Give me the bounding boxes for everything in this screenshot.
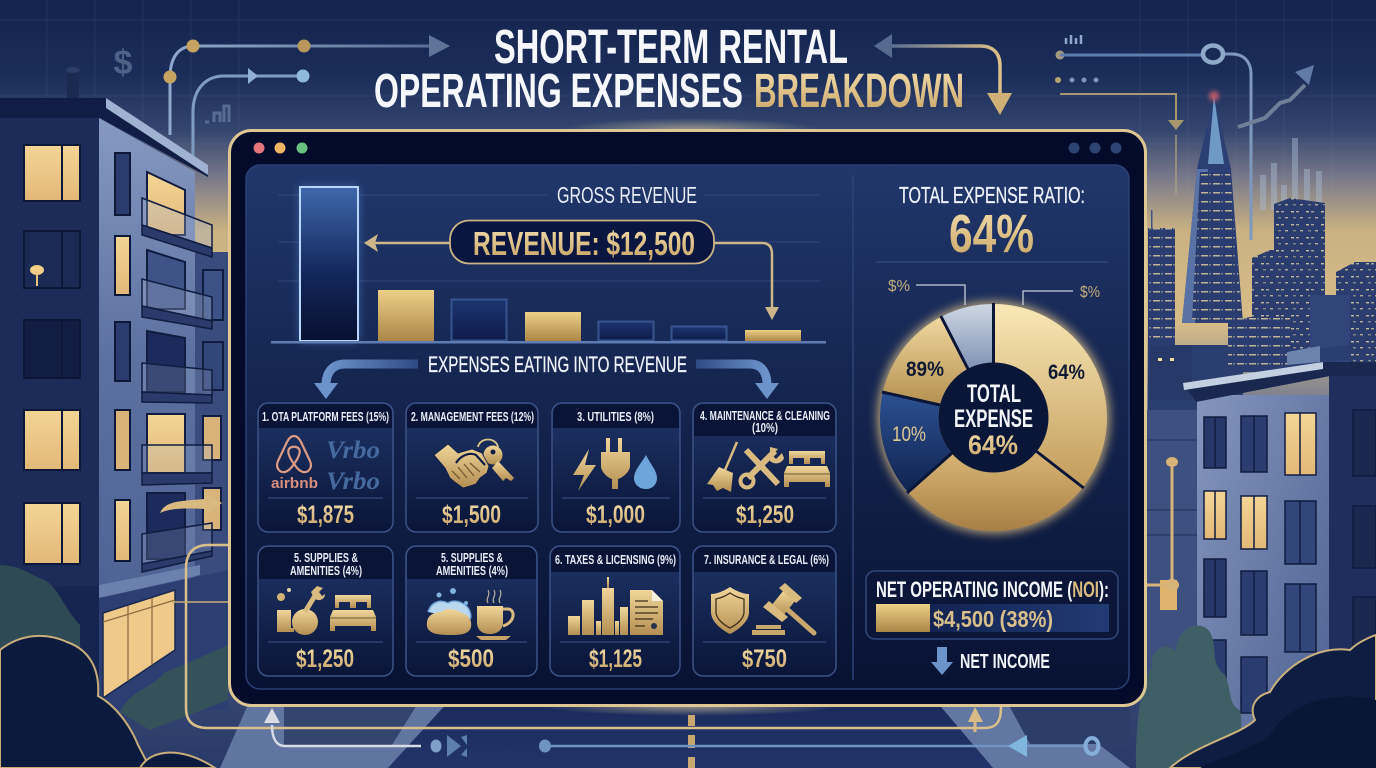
callout: revenue: REVENUE: $12,500: [473, 225, 695, 262]
icon: city buildings: [568, 577, 628, 635]
window toolbar dots: [1068, 142, 1122, 154]
card: supplies and amenities, maintenance items: $1,250: [296, 645, 354, 673]
donut chart: 89%: [906, 358, 944, 381]
arrow: revenue to gross bar: [364, 234, 450, 252]
card: insurance and legal: [693, 546, 836, 676]
arrow: left building: [160, 492, 222, 515]
street: [220, 700, 1130, 768]
donut chart: [878, 278, 1110, 534]
icon: cup, fruit and wrench: [277, 586, 325, 635]
donut chart: 10%: [892, 423, 926, 446]
arrow: revenue to last bar: [714, 243, 779, 320]
icon: bed: [784, 451, 830, 487]
title: BREAKDOWN: [754, 65, 964, 118]
donut chart: TOTAL: [967, 380, 1021, 408]
card: taxes and licensing: 6. TAXES & LICENSING (9%): [555, 552, 676, 567]
card: maintenance and cleaning: 4. MAINTENANCE & CLEANING: [700, 408, 830, 423]
icon: plug: [601, 438, 630, 489]
decorative gold route line: [186, 545, 1001, 728]
heading: gross revenue: GROSS REVENUE: [557, 182, 697, 208]
background bars right: [1260, 138, 1322, 210]
card: management fees: [406, 403, 538, 532]
decorative flow lines top right: [874, 34, 1314, 240]
icon: water drop: [634, 455, 657, 489]
arrow: expenses left: [314, 364, 418, 399]
building mid right: [1146, 410, 1201, 720]
balconies: [142, 198, 212, 572]
icon: shield: [711, 587, 749, 634]
card: maintenance and cleaning: (10%): [752, 420, 778, 435]
value: total expense ratio: 64%: [949, 204, 1034, 264]
callout: revenue: [450, 220, 714, 264]
donut chart: $%: [1080, 284, 1100, 301]
icon: coffee cup: [476, 590, 513, 640]
card: supplies and amenities, soap and coffee: 5. SUPPLIES &: [441, 550, 503, 565]
icon: Vrbo logos: Vrbo: [326, 468, 380, 495]
heading: expenses eating into revenue: EXPENSES EATING INTO REVENUE: [428, 352, 687, 377]
donut chart: EXPENSE: [954, 405, 1033, 433]
bar chart: gross revenue vs expenses: [271, 187, 826, 344]
icon: gavel: [752, 583, 814, 635]
donut chart: 64%: [968, 430, 1018, 460]
title: [374, 21, 964, 118]
card: utilities: $1,000: [586, 501, 645, 529]
road flow arrows: [264, 707, 1098, 757]
icon: Vrbo logos: [326, 437, 380, 495]
label: net income: NET INCOME: [960, 651, 1050, 673]
donut chart: 64%: [1048, 361, 1085, 384]
bushes right: [1136, 626, 1376, 768]
card: supplies and amenities, maintenance items: 5. SUPPLIES &: [294, 550, 358, 565]
title: SHORT-TERM RENTAL: [494, 21, 848, 74]
icon: dollar sign: $: [114, 44, 133, 82]
card: management fees: 2. MANAGEMENT FEES (12%): [411, 409, 534, 424]
building left: [0, 67, 228, 768]
skyline right: [1148, 91, 1376, 410]
bushes left: [0, 565, 228, 768]
card: OTA platform fees: 1. OTA PLATFORM FEES (15%): [262, 409, 389, 424]
card: insurance and legal: 7. INSURANCE & LEGAL (6%): [704, 552, 829, 567]
decorative flow lines top left: [164, 35, 450, 165]
donut chart: $%: [888, 278, 910, 295]
card: OTA platform fees: [258, 403, 393, 532]
heading: total expense ratio: TOTAL EXPENSE RATIO:: [899, 182, 1085, 208]
panel: net operating income: $4,500 (38%): [933, 606, 1053, 632]
title: OPERATING EXPENSES: [374, 65, 743, 118]
card: taxes and licensing: $1,125: [589, 645, 642, 673]
card: supplies and amenities, soap and coffee: [406, 546, 537, 676]
card: insurance and legal: $750: [742, 645, 787, 673]
card: maintenance and cleaning: $1,250: [736, 501, 794, 529]
inner panel: [246, 165, 1129, 689]
donut leader lines: [916, 285, 1073, 305]
card: supplies and amenities, maintenance items: [258, 546, 393, 676]
icon: broom: [707, 442, 737, 492]
arrow: expenses right: [696, 364, 779, 399]
card: utilities: [552, 403, 680, 532]
icon: document: [630, 590, 663, 635]
card: supplies and amenities, maintenance items: AMENITIES (4%): [290, 563, 362, 578]
card: supplies and amenities, soap and coffee: AMENITIES (4%): [436, 563, 508, 578]
icon: handshake and key: [434, 440, 514, 488]
window control dots: [254, 142, 308, 154]
icon: bed: [330, 595, 376, 631]
icon: airbnb logo: airbnb: [271, 475, 318, 492]
icon: down arrow: [931, 647, 953, 675]
icon: soap foam: [427, 588, 471, 635]
building right foreground: [1183, 345, 1376, 768]
card: maintenance and cleaning: [693, 403, 836, 532]
card: supplies and amenities, soap and coffee: $500: [448, 645, 494, 673]
panel: net operating income: [866, 571, 1118, 639]
card: management fees: $1,500: [442, 501, 501, 529]
card: OTA platform fees: $1,875: [297, 501, 354, 529]
icon: Vrbo logos: Vrbo: [326, 437, 380, 464]
card: taxes and licensing: [550, 546, 680, 676]
icon: lightning bolt: [573, 449, 596, 491]
icon: pyramid tower: [1182, 91, 1243, 323]
icon: tools: [740, 447, 784, 488]
card: utilities: 3. UTILITIES (8%): [577, 409, 654, 424]
dashboard window: [230, 118, 1146, 716]
panel: net operating income: NET OPERATING INCOME (NOI):: [876, 577, 1109, 602]
